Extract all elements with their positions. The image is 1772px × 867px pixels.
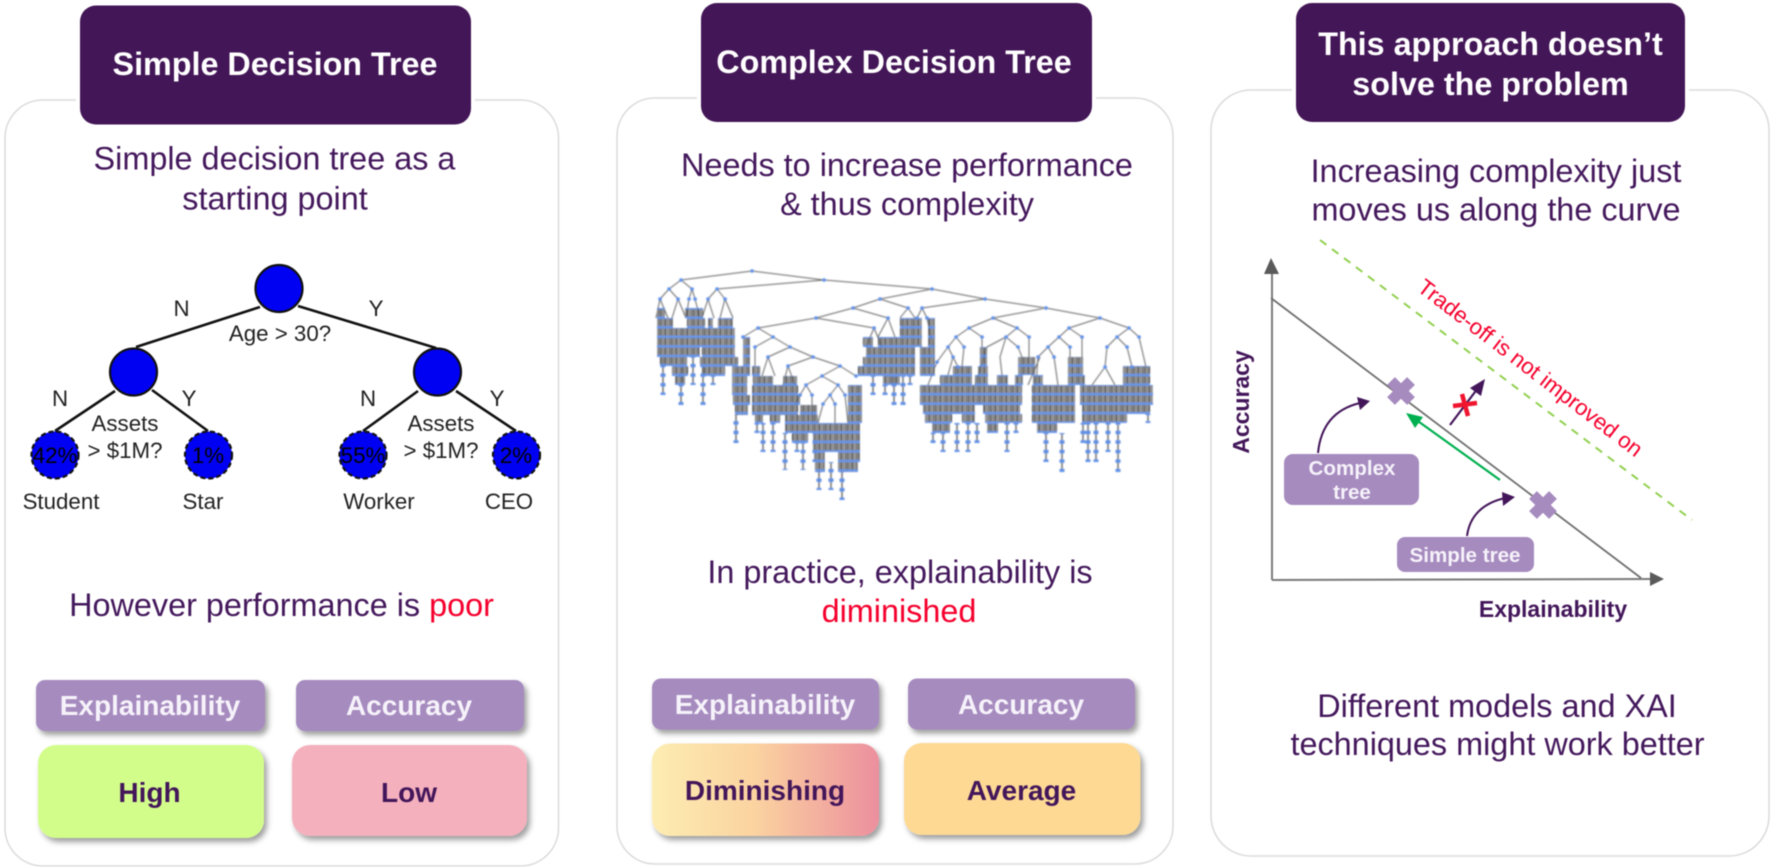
- text: starting point: [94, 140, 456, 216]
- tree nodes: [660, 271, 1139, 404]
- marker: simple tree: [1533, 495, 1553, 515]
- label: complex tree: [1284, 454, 1419, 505]
- heading: this approach does not solve the problem: solve the problem: [1352, 66, 1629, 102]
- x axis: [1272, 572, 1664, 586]
- diagram: simple tree: Worker: [343, 489, 415, 514]
- rating: low: [292, 745, 527, 836]
- heading: simple decision tree: [80, 6, 471, 124]
- hanging leaf chains: [663, 357, 1148, 500]
- diagram: simple tree: 42%: [33, 443, 77, 468]
- label: complex tree: tree: [1333, 481, 1371, 504]
- rating: high: High: [118, 777, 181, 808]
- text: starting point: Simple decision tree as a: [94, 140, 456, 176]
- text: explainability is diminished: [707, 554, 1093, 629]
- label: accuracy: Accuracy: [958, 689, 1084, 720]
- marker: complex tree: [1391, 381, 1411, 401]
- diagram: simple tree: Student: [23, 489, 100, 514]
- diagram: simple tree: Star: [183, 489, 224, 514]
- text: starting point: starting point: [182, 180, 368, 216]
- diagram: simple tree: Y: [182, 386, 197, 411]
- panel: approach does not solve the problem: [1211, 3, 1769, 856]
- label: simple tree: Simple tree: [1409, 544, 1521, 567]
- heading: complex decision tree: Complex Decision Tree: [716, 44, 1072, 80]
- arrow: complex tree pointer: [1318, 397, 1370, 453]
- diagram: simple tree: > $1M?: [88, 438, 162, 463]
- panel: complex decision tree: [617, 3, 1173, 864]
- heading: this approach does not solve the problem: [1296, 3, 1685, 122]
- y axis: [1264, 258, 1279, 580]
- text: needs to increase performance: Needs to increase performance: [681, 147, 1133, 183]
- text: different models and XAI: techniques might work better: [1290, 726, 1705, 762]
- text: different models and XAI: Different models and XAI: [1317, 688, 1677, 724]
- label: complex tree: Complex: [1309, 457, 1396, 480]
- diagram: complex tree: [656, 271, 1153, 500]
- icon: red cross: [1453, 394, 1477, 416]
- diagram: simple tree: 2%: [500, 443, 532, 468]
- x axis title: Explainability: [1479, 596, 1627, 622]
- diagram: simple tree: > $1M?: [404, 438, 478, 463]
- rating: diminishing: [652, 744, 879, 836]
- label: trade-off not improved: Trade-off is not improved on: [1413, 274, 1648, 462]
- arrow: blocked improvement: [1450, 379, 1485, 425]
- diagram: simple tree: N: [52, 386, 68, 411]
- heading: simple decision tree: Simple Decision Tree: [113, 46, 437, 82]
- diagram: simple tree: [23, 265, 540, 514]
- y axis title: Accuracy: [1228, 350, 1254, 454]
- rating: average: [904, 743, 1140, 835]
- diagram: simple tree: Y: [490, 386, 505, 411]
- diagram: simple tree: 1%: [192, 443, 224, 468]
- trade-off curve: [1271, 298, 1641, 578]
- rating: diminishing: Diminishing: [685, 775, 845, 806]
- text: moves along the curve: [1311, 153, 1681, 228]
- label: accuracy: Accuracy: [346, 690, 472, 721]
- arrow: simple tree pointer: [1467, 492, 1515, 536]
- diagram: simple tree: N: [360, 386, 376, 411]
- text: explainability is diminished: diminished: [822, 593, 976, 629]
- diagram: simple tree: CEO: [485, 489, 533, 514]
- heading: this approach does not solve the problem: This approach doesn’t: [1318, 26, 1663, 62]
- heading: complex decision tree: [701, 3, 1092, 122]
- diagram: simple tree: 55%: [341, 443, 385, 468]
- text: needs to increase performance: [681, 147, 1133, 222]
- arrow: green movement along curve: [1406, 413, 1500, 480]
- text: moves along the curve: Increasing complexity just: [1311, 153, 1681, 189]
- diagram: simple tree: Y: [369, 296, 384, 321]
- text: explainability is diminished: In practice, explainability is: [707, 554, 1093, 590]
- panel: simple decision tree: [5, 6, 558, 866]
- diagram: simple tree: Assets: [408, 411, 474, 436]
- improved trade-off line: [1320, 240, 1692, 520]
- diagram: simple tree: Assets: [92, 411, 158, 436]
- rating: average: Average: [967, 775, 1076, 806]
- label: explainability: Explainability: [675, 689, 856, 720]
- label: accuracy: [908, 678, 1135, 730]
- label: explainability: [36, 680, 265, 731]
- label: accuracy: [296, 680, 524, 731]
- text: performance is poor: However performance is poor: [69, 587, 494, 623]
- label: explainability: Explainability: [60, 690, 241, 721]
- diagram: simple tree: N: [173, 296, 190, 321]
- label: simple tree: [1397, 537, 1534, 572]
- dense node clusters: [657, 308, 1153, 472]
- rating: low: Low: [381, 777, 437, 808]
- text: moves along the curve: moves us along the curve: [1311, 192, 1681, 228]
- diagram: simple tree: Age > 30?: [229, 321, 331, 346]
- chart: accuracy vs explainability trade-off: [1228, 240, 1692, 622]
- rating: high: [38, 745, 264, 838]
- text: needs to increase performance: & thus complexity: [780, 186, 1035, 222]
- text: different models and XAI: [1290, 688, 1705, 762]
- label: explainability: [652, 678, 879, 730]
- tree branches: [656, 271, 1146, 423]
